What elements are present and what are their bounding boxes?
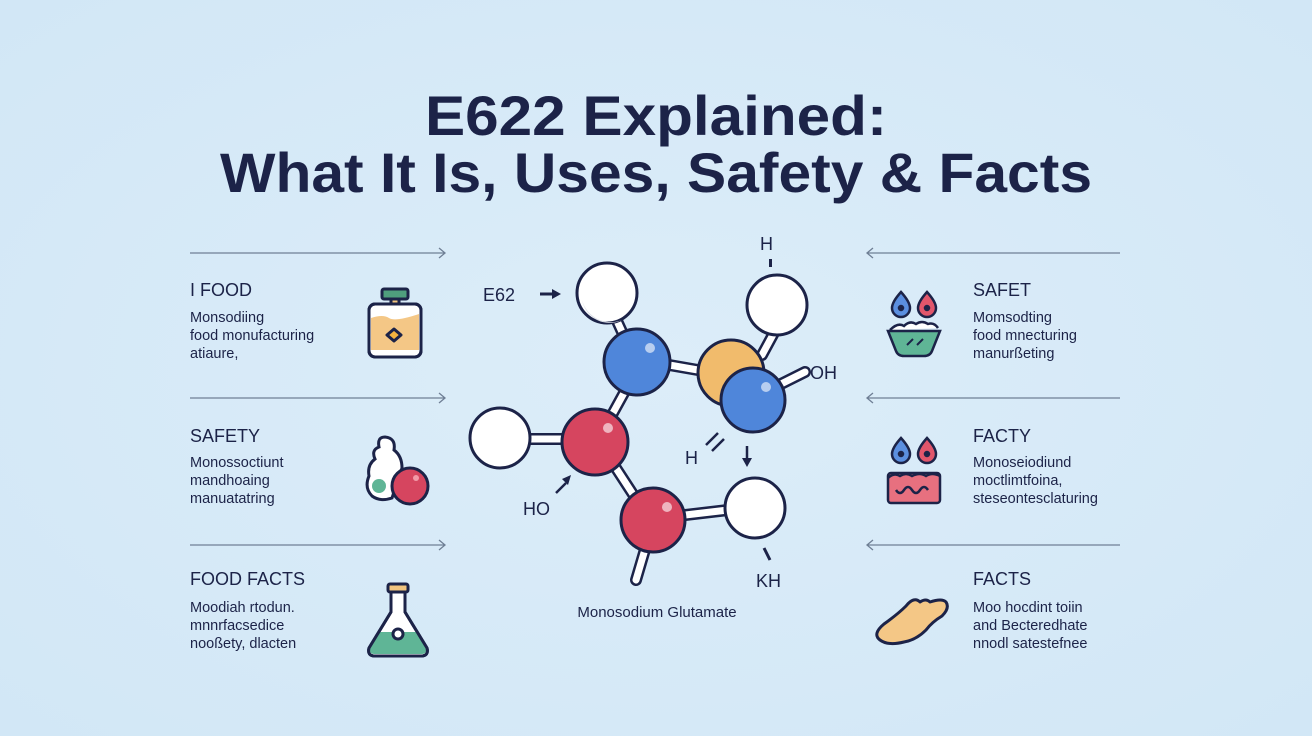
panel: right safet [973,280,1077,362]
icon: ginger [877,600,947,644]
panel: left food facts [190,569,305,652]
labels: molecule: KH [756,571,781,591]
title [220,84,1092,204]
icon: salt and ball [367,437,428,504]
panel: left food [190,280,314,362]
panel: right facts: and Becteredhate [973,618,1087,634]
panel: right facts [973,569,1087,652]
labels: molecule [483,234,837,621]
panel: left food facts: Moodiah rtodun. [190,600,295,616]
labels: molecule: H [760,234,773,254]
panel: right facty: FACTY [973,426,1031,446]
panel: left food: Monsodiing [190,310,264,326]
chart: molecule [470,263,807,580]
panel: left food: I FOOD [190,280,252,300]
panel: right facty: Monoseiodiund [973,455,1071,471]
panel: right facty: moctlimtfoina, [973,473,1062,489]
title: What It Is, Uses, Safety & Facts [220,141,1092,204]
labels: molecule: E62 [483,285,515,305]
labels: molecule: H [685,448,698,468]
panel: left food facts: nooßety, dlacten [190,636,296,652]
icon: drops and bowl [888,292,940,356]
panel: right facts: nnodl satestefnee [973,636,1087,652]
panel: right facts: FACTS [973,569,1031,589]
panel: right facty: steseontesclaturing [973,491,1098,507]
panel: right facty [973,426,1098,507]
panel: right safet: manurßeting [973,346,1054,362]
labels: molecule: Monosodium Glutamate [577,604,737,621]
panel: left food facts: mnnrfacsedice [190,618,284,634]
panel: left food: food monufacturing [190,328,314,344]
panel: left safety: mandhoaing [190,473,270,489]
labels: molecule: OH [810,363,837,383]
panel: left safety: Monossoctiunt [190,455,284,471]
panel: right safet: SAFET [973,280,1031,300]
panel: left safety: manuatatring [190,491,275,507]
panel: right safet: food mnecturing [973,328,1077,344]
icon: jar [369,289,421,357]
labels: molecule: HO [523,499,550,519]
panel: left safety: SAFETY [190,426,260,446]
panel: right facts: Moo hocdint toiin [973,600,1083,616]
panel: right safet: Momsodting [973,310,1052,326]
icon: drops and tray [888,438,940,503]
panel: left food: atiaure, [190,346,238,362]
title: E622 Explained: [425,84,887,147]
icon: flask [369,584,427,656]
panel: left food facts: FOOD FACTS [190,569,305,589]
panel: left safety [190,426,284,507]
